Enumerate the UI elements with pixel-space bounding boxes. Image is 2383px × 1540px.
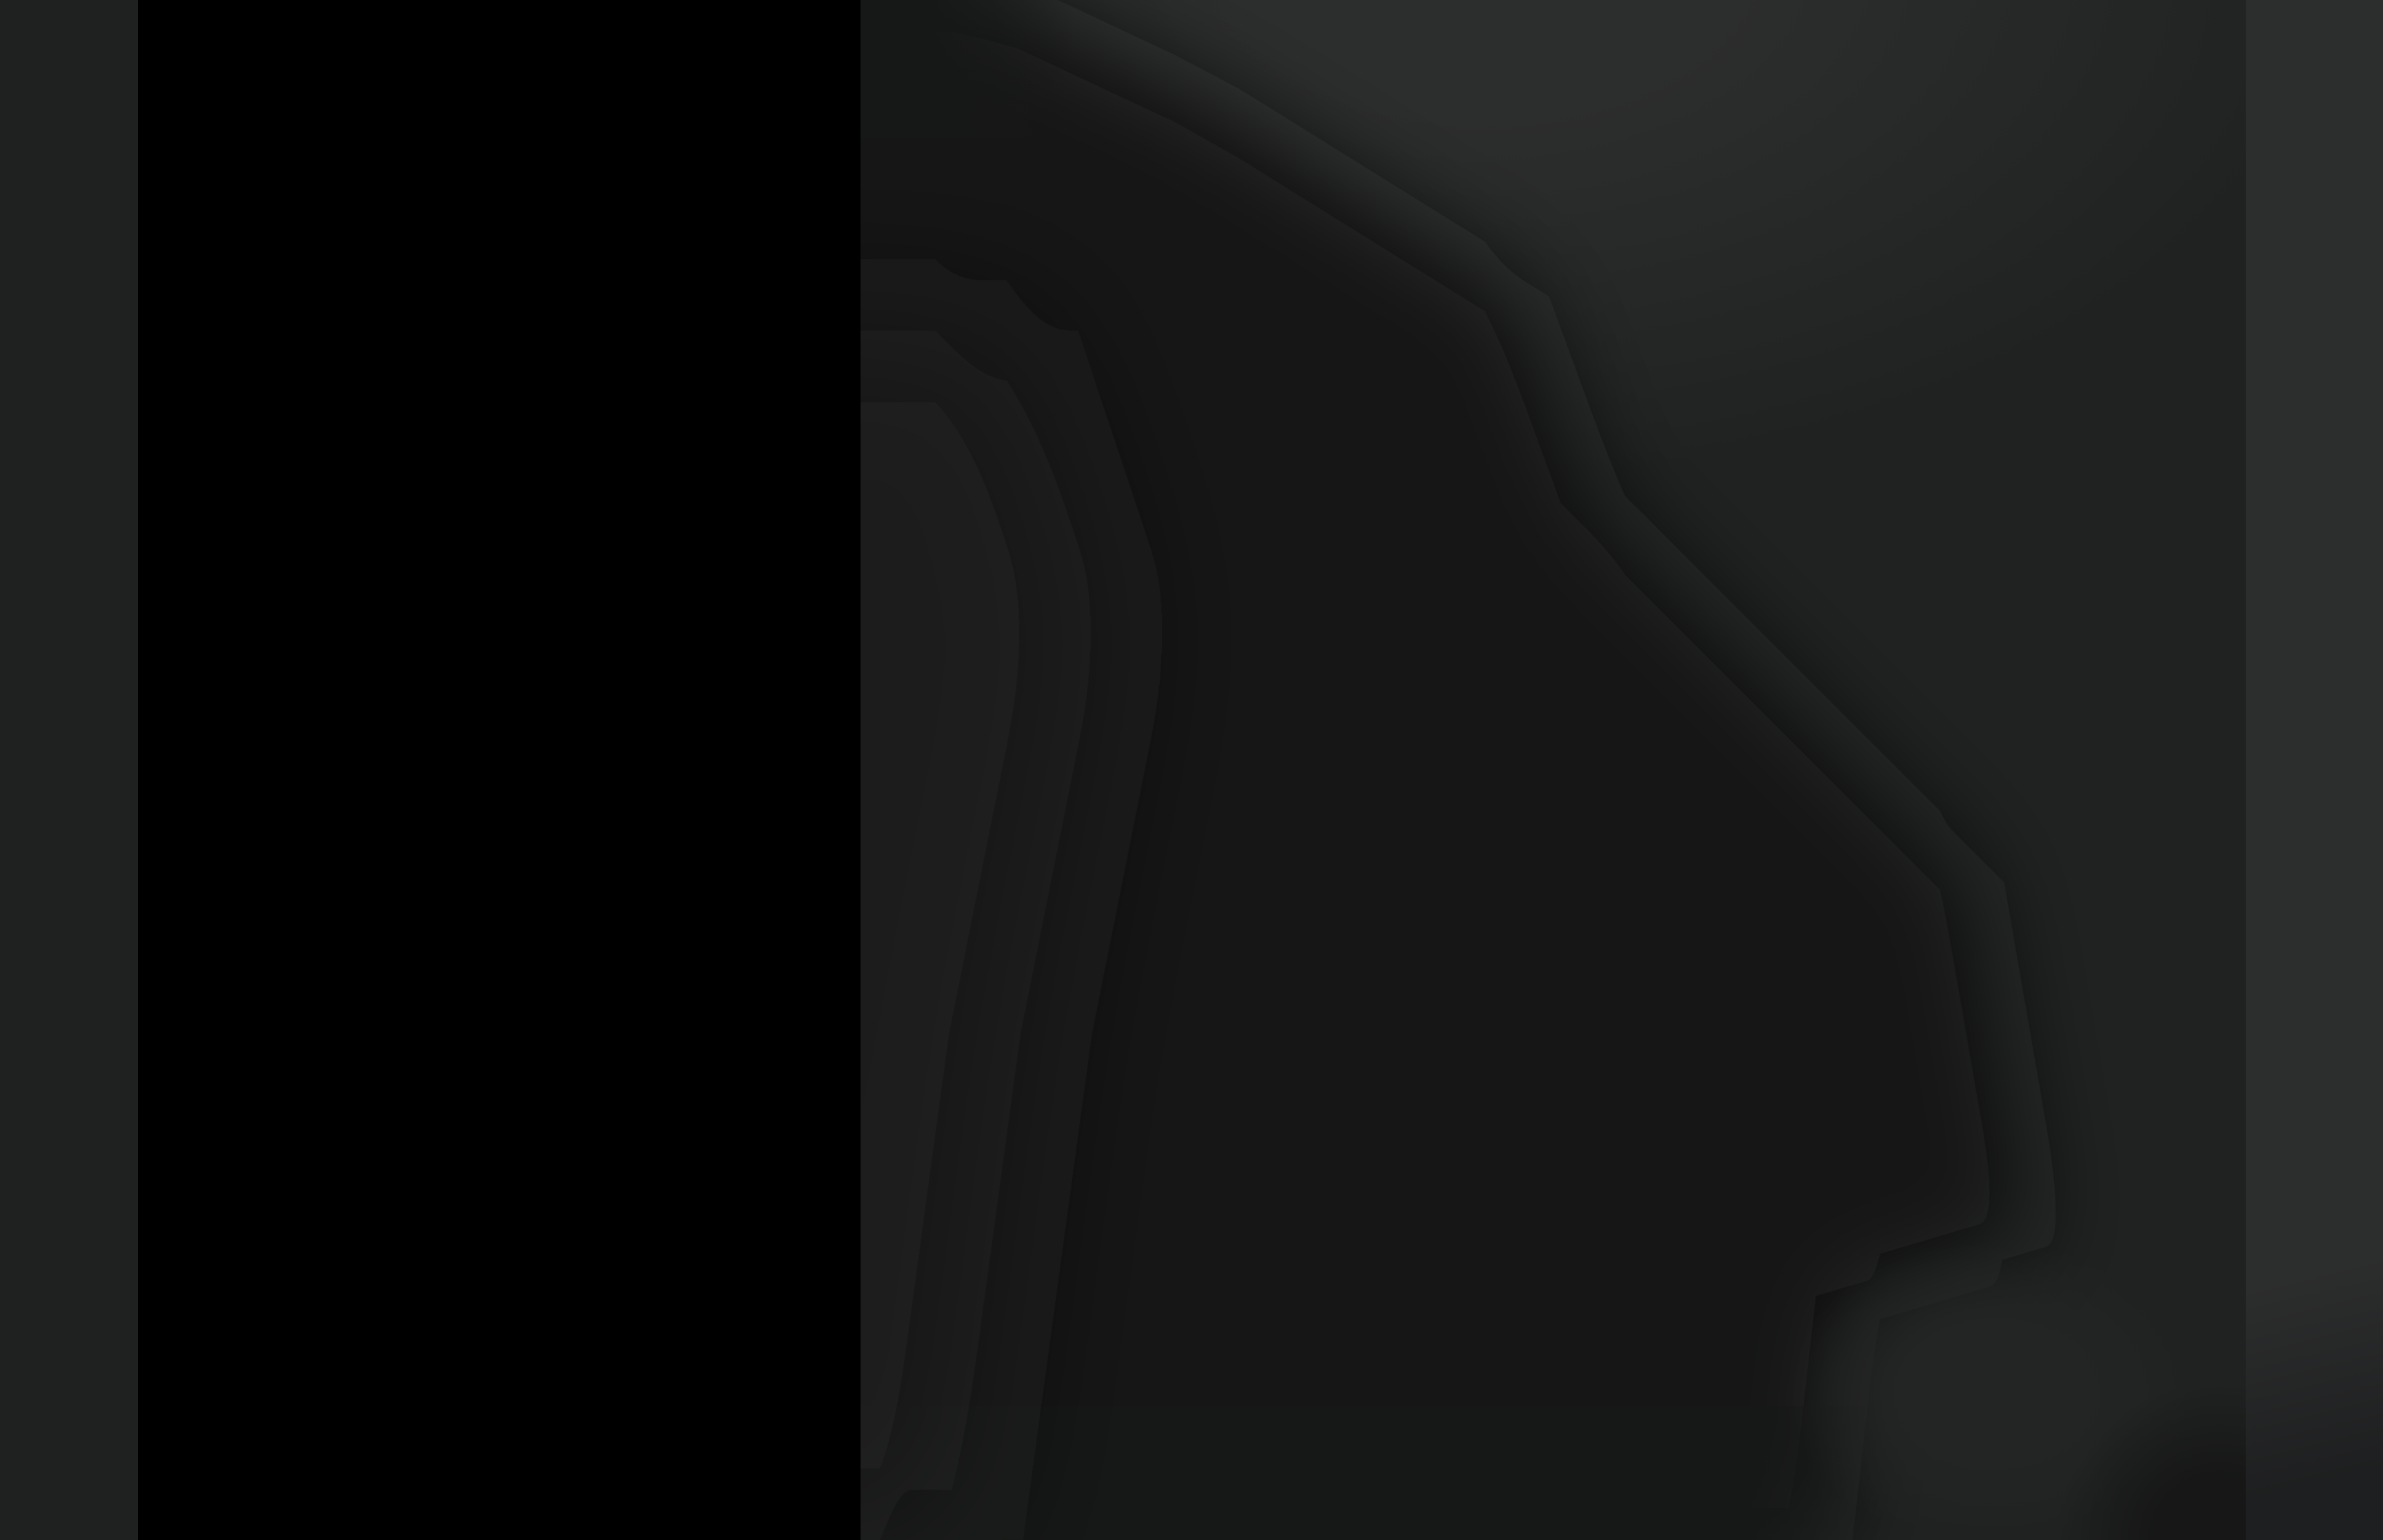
light area: upper right glow — [1088, 0, 1940, 237]
dark area: bottom right corner — [2055, 1379, 2246, 1540]
panel: main gradient field — [861, 0, 2246, 1540]
panel: left strip — [0, 0, 138, 1540]
dark area: bottom edge correction — [861, 1406, 1895, 1540]
panel: right strip — [2246, 0, 2383, 1540]
panel: black column — [138, 0, 861, 1540]
dark area: top edge correction — [861, 0, 1081, 138]
light area: lower blob — [1869, 1324, 1887, 1402]
left edge of main field — [861, 403, 942, 1468]
dark area: central diagonal shadow — [861, 0, 2048, 1406]
